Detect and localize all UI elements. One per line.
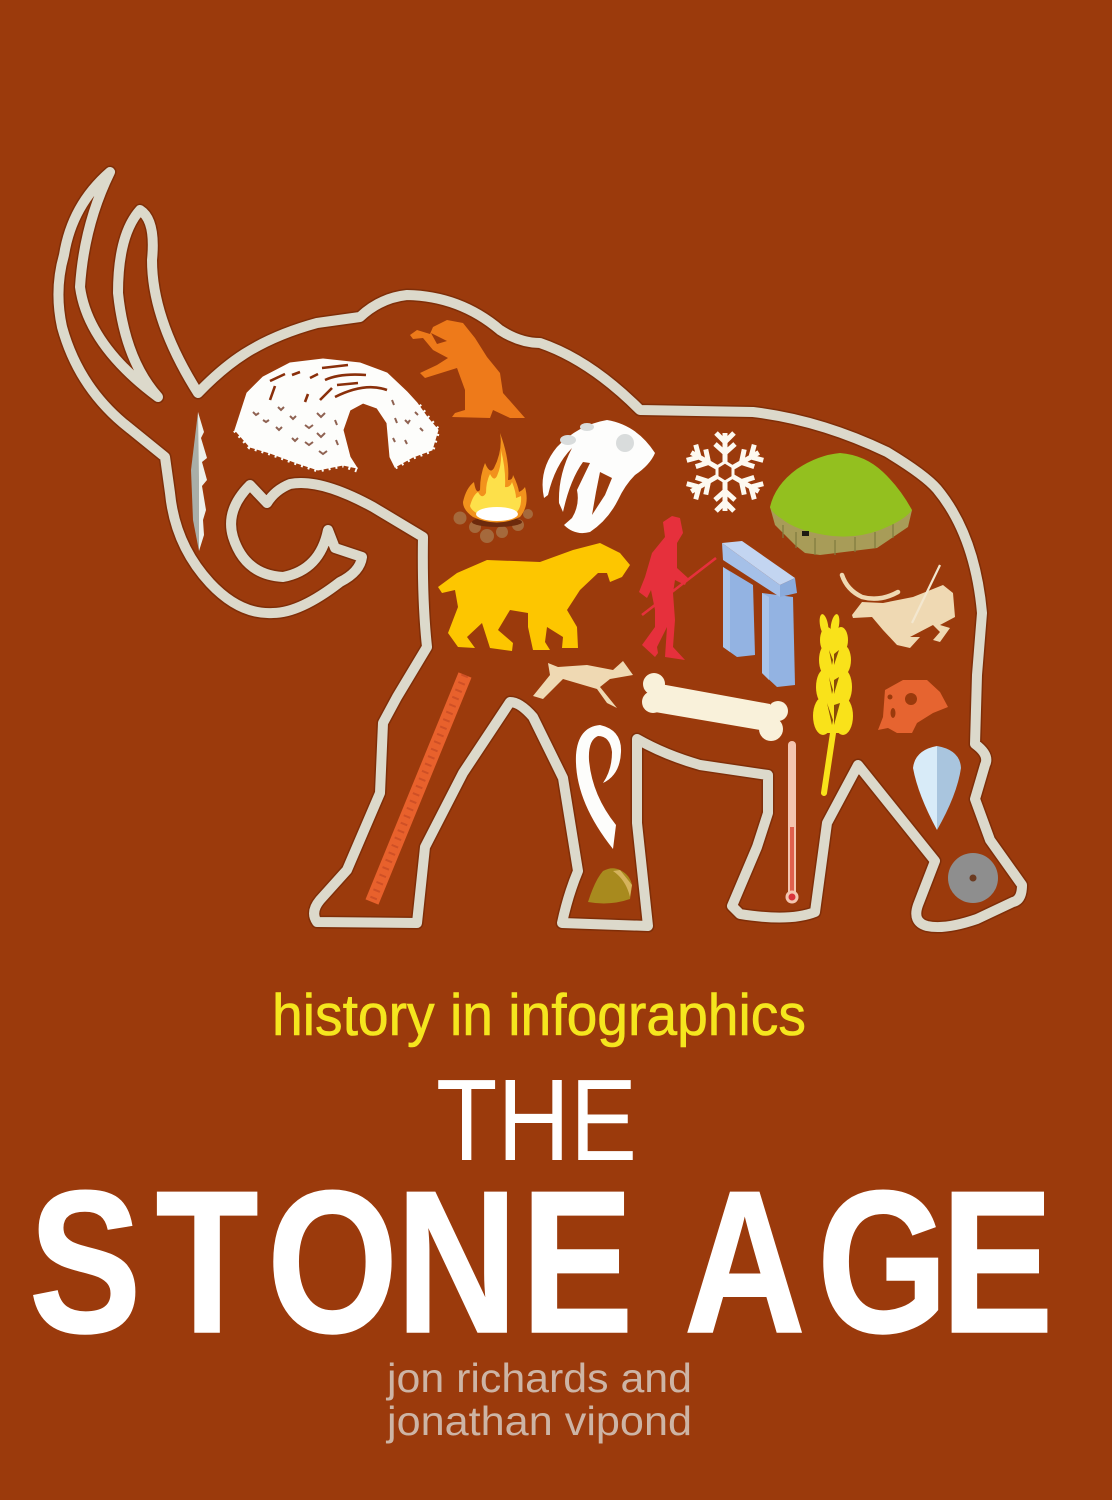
icon: curled horn — [576, 725, 621, 849]
series title: history in infographics — [272, 983, 806, 1048]
icon: thermometer — [786, 741, 798, 904]
icon: early human with spear — [639, 516, 716, 660]
icon: mammoth-bone hut — [235, 359, 438, 470]
icon: flint spearhead — [913, 746, 961, 830]
mammoth outline — [58, 172, 1022, 927]
icon: cave bear — [410, 320, 525, 418]
icon: grinding stone — [948, 853, 998, 903]
icon: grassy burial mound — [770, 453, 912, 555]
icon: hominid skull — [878, 680, 948, 733]
authors — [386, 1355, 692, 1444]
title: Stone Age: STONE AGE — [29, 1148, 1053, 1376]
icon: bone — [642, 673, 788, 741]
title: The: THE — [436, 1055, 637, 1185]
icon: tally ruler — [372, 675, 465, 902]
icon: hand-axe stone — [588, 868, 632, 903]
icon: campfire — [454, 433, 533, 543]
icon: barbed harpoon point — [191, 412, 207, 551]
icon: wheat ear — [813, 613, 853, 793]
icon: sabre-tooth cat — [438, 543, 630, 651]
icon: snowflake — [686, 433, 764, 511]
authors: jonathan vipond — [386, 1398, 692, 1444]
icon: cave-painting deer — [533, 661, 633, 708]
icon: sabre-tooth skull — [543, 420, 655, 533]
authors: jon richards and — [386, 1355, 692, 1401]
icon: stone trilithon — [722, 541, 797, 687]
icon: cave-painting bull — [842, 565, 955, 648]
